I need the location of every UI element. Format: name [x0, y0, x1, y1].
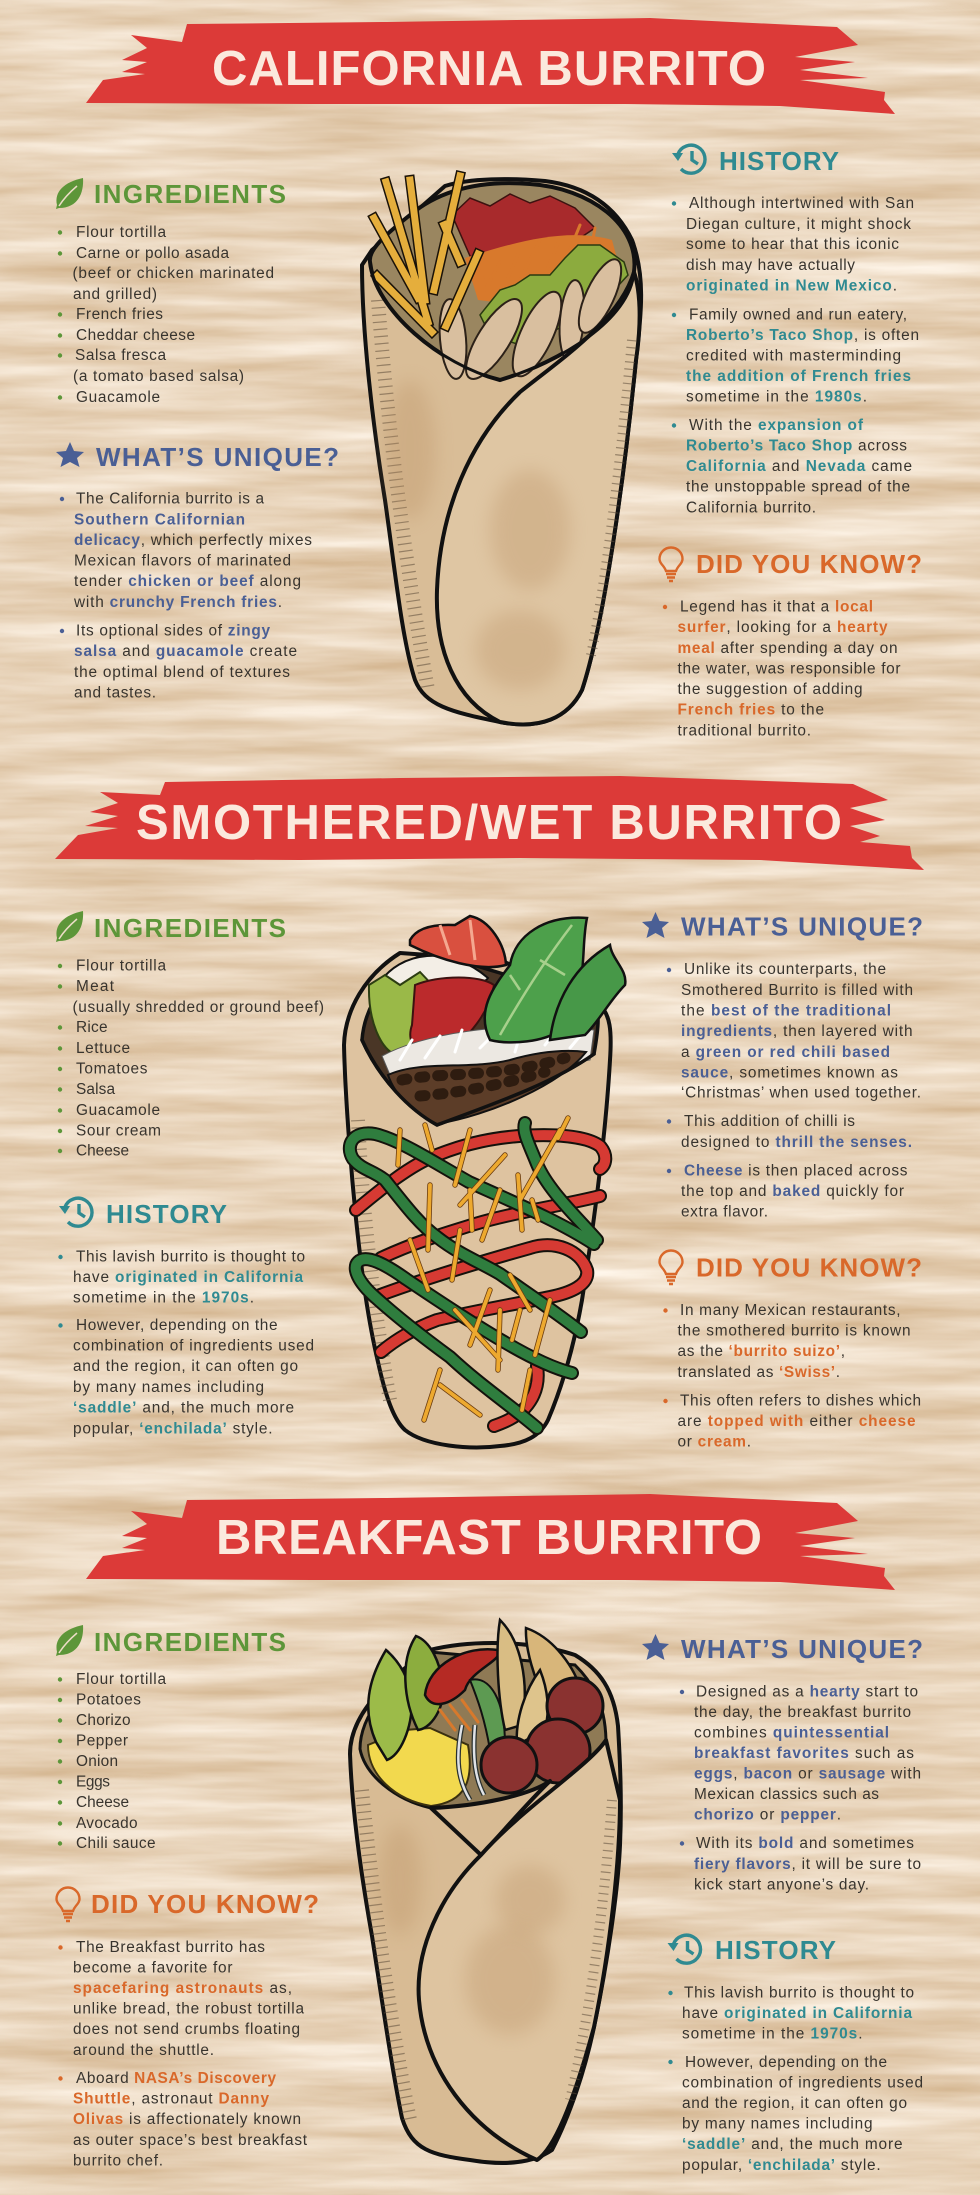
body text: [672, 195, 919, 516]
body text: the water, was responsible for: [678, 660, 900, 677]
ingredients list: [58, 224, 274, 406]
body text: Legend has it that a local: [680, 599, 873, 616]
body text: fiery flavors, it will be sure to: [694, 1856, 921, 1873]
panel: ingredients: [56, 1625, 286, 1852]
body text: Its optional sides of zingy: [76, 622, 270, 640]
body text: ingredients, then layered with: [681, 1023, 912, 1040]
body text: salsa and guacamole create: [74, 643, 297, 660]
ingredients list: Guacamole: [76, 1102, 160, 1119]
panel: history: [672, 145, 919, 516]
body text: meal after spending a day on: [678, 640, 898, 657]
body text: Mexican flavors of marinated: [74, 553, 291, 570]
body text: by many names including: [682, 2116, 872, 2133]
body text: the best of the traditional: [681, 1002, 891, 1020]
body text: kick start anyone’s day.: [694, 1876, 869, 1893]
body text: The Breakfast burrito has: [76, 1939, 265, 1956]
body text: around the shuttle.: [73, 2042, 214, 2059]
body text: ‘Christmas’ when used together.: [681, 1085, 921, 1102]
body text: combination of ingredients used: [682, 2074, 923, 2091]
body text: Roberto’s Taco Shop across: [686, 437, 907, 454]
icon: leaf: [56, 178, 83, 209]
title banner: Breakfast Burrito: [86, 1494, 895, 1590]
body text: are topped with either cheese: [678, 1413, 916, 1430]
body text: the smothered burrito is known: [678, 1322, 910, 1340]
ingredients list: (usually shredded or ground beef): [72, 999, 324, 1016]
body text: Southern Californian: [74, 512, 245, 528]
icon: light bulb: [56, 1888, 80, 1921]
illustration: California burrito: [362, 176, 641, 724]
heading: ingredients: INGREDIENTS: [94, 179, 286, 209]
ingredients list: and grilled): [73, 286, 157, 303]
body text: some to hear that this iconic: [686, 236, 899, 253]
body text: Although intertwined with San: [689, 195, 914, 212]
title banner: Smothered/Wet Burrito: [55, 776, 924, 870]
ingredients list: Meat: [76, 978, 115, 995]
ingredients list: Onion: [76, 1753, 118, 1770]
panel: did you know: [660, 548, 922, 739]
heading: did you know: DID YOU KNOW?: [696, 549, 922, 579]
body text: the optimal blend of textures: [74, 664, 290, 681]
ingredients list: Cheese: [76, 1143, 129, 1160]
body text: as the ‘burrito suizo’,: [678, 1343, 845, 1360]
body text: Unlike its counterparts, the: [684, 961, 886, 978]
title banner: Smothered/Wet Burrito: SMOTHERED/WET BURRITO: [136, 796, 842, 850]
body text: However, depending on the: [76, 1317, 278, 1334]
ingredients list: Flour tortilla: [76, 958, 166, 974]
body text: extra flavor.: [681, 1204, 768, 1221]
body text: burrito chef.: [73, 2153, 163, 2170]
body text: delicacy, which perfectly mixes: [74, 532, 312, 549]
panel: history: [58, 1198, 314, 1437]
body text: translated as ‘Swiss’.: [678, 1364, 840, 1381]
heading: history: HISTORY: [106, 1199, 227, 1229]
body text: [663, 1302, 921, 1451]
heading: what's unique: WHAT’S UNIQUE?: [96, 442, 339, 472]
body text: French fries to the: [678, 702, 824, 718]
body text: eggs, bacon or sausage with: [694, 1766, 921, 1782]
body text: the day, the breakfast burrito: [694, 1704, 911, 1721]
body text: credited with masterminding: [686, 348, 901, 365]
title banner: California Burrito: CALIFORNIA BURRITO: [212, 42, 766, 96]
body text: Family owned and run eatery,: [689, 306, 907, 323]
body text: have originated in California: [73, 1269, 303, 1286]
body text: This addition of chilli is: [684, 1113, 855, 1130]
body text: spacefaring astronauts as,: [73, 1980, 292, 1997]
body text: combination of ingredients used: [73, 1338, 314, 1355]
body text: unlike bread, the robust tortilla: [73, 2000, 304, 2017]
body text: sometime in the 1970s.: [73, 1290, 254, 1306]
ingredients list: [58, 1671, 166, 1852]
icon: clock arrow: [59, 1198, 92, 1226]
ingredients list: Tomatoes: [76, 1060, 148, 1077]
ingredients list: Pepper: [76, 1733, 128, 1750]
body text: Olivas is affectionately known: [73, 2111, 301, 2128]
heading: what's unique: WHAT’S UNIQUE?: [681, 1634, 923, 1664]
body text: [58, 1939, 308, 2170]
panel: what's unique: [56, 442, 339, 702]
body text: with crunchy French fries.: [73, 594, 282, 611]
icon: leaf: [56, 1625, 83, 1656]
ingredients list: Avocado: [76, 1815, 138, 1832]
heading: did you know: DID YOU KNOW?: [696, 1252, 922, 1282]
ingredients list: (a tomato based salsa): [73, 368, 244, 385]
body text: California burrito.: [686, 499, 816, 516]
body text: chorizo or pepper.: [694, 1806, 841, 1824]
ingredients list: Sour cream: [76, 1122, 161, 1139]
section: Breakfast burrito: [56, 1494, 923, 2174]
body text: as outer space’s best breakfast: [73, 2132, 308, 2149]
body text: tender chicken or beef along: [74, 573, 301, 590]
body text: California and Nevada came: [686, 458, 912, 475]
body text: the unstoppable spread of the: [686, 478, 910, 496]
body text: Shuttle, astronaut Danny: [73, 2091, 269, 2108]
body text: popular, ‘enchilada’ style.: [73, 1420, 272, 1437]
ingredients list: Cheddar cheese: [76, 327, 195, 344]
heading: history: HISTORY: [719, 146, 839, 176]
body text: Cheese is then placed across: [684, 1162, 908, 1179]
ingredients list: Chorizo: [76, 1712, 131, 1729]
illustration: breakfast burrito: [350, 1620, 621, 2163]
body text: originated in New Mexico.: [686, 277, 897, 294]
ingredients list: French fries: [76, 306, 163, 323]
title banner: California Burrito: [86, 18, 895, 114]
ingredients list: Salsa: [76, 1081, 115, 1098]
body text: Smothered Burrito is filled with: [681, 982, 913, 999]
section: Smothered/Wet burrito: [55, 776, 924, 1451]
body text: With its bold and sometimes: [696, 1835, 914, 1852]
ingredients list: (beef or chicken marinated: [72, 265, 274, 282]
body text: the top and baked quickly for: [681, 1183, 904, 1200]
body text: breakfast favorites such as: [694, 1745, 914, 1762]
panel: did you know: [56, 1888, 319, 2170]
icon: star: [642, 1634, 669, 1660]
body text: sauce, sometimes known as: [681, 1064, 898, 1082]
heading: ingredients: INGREDIENTS: [94, 913, 286, 943]
body text: [60, 491, 312, 702]
ingredients list: Rice: [76, 1019, 108, 1036]
ingredients list: Potatoes: [76, 1692, 141, 1709]
heading: ingredients: INGREDIENTS: [94, 1627, 286, 1657]
body text: [58, 1248, 314, 1437]
body text: sometime in the 1980s.: [686, 388, 867, 405]
body text: traditional burrito.: [678, 722, 811, 739]
body text: dish may have actually: [686, 257, 855, 274]
body text: Designed as a hearty start to: [696, 1683, 918, 1700]
body text: and the region, it can often go: [682, 2095, 907, 2112]
ingredients list: [58, 958, 324, 1160]
ingredients list: Cheese: [76, 1794, 129, 1811]
body text: and tastes.: [74, 684, 156, 702]
icon: star: [642, 912, 669, 938]
body text: have originated in California: [682, 2005, 912, 2022]
body text: Diegan culture, it might shock: [686, 216, 911, 233]
ingredients list: Chili sauce: [76, 1835, 156, 1852]
icon: leaf: [56, 911, 83, 942]
body text: Mexican classics such as: [694, 1786, 879, 1803]
panel: ingredients: [56, 911, 324, 1160]
heading: what's unique: WHAT’S UNIQUE?: [681, 912, 923, 942]
body text: [680, 1683, 921, 1893]
panel: did you know: [660, 1250, 922, 1451]
title banner: Breakfast Burrito: BREAKFAST BURRITO: [216, 1511, 762, 1565]
body text: [668, 1984, 923, 2174]
panel: what's unique: [642, 1634, 923, 1893]
body text: ‘saddle’ and, the much more: [682, 2136, 902, 2153]
ingredients list: Flour tortilla: [76, 1671, 166, 1688]
ingredients list: Salsa fresca: [75, 347, 166, 364]
body text: surfer, looking for a hearty: [678, 619, 888, 636]
body text: In many Mexican restaurants,: [680, 1302, 900, 1319]
ingredients list: Guacamole: [76, 389, 160, 406]
icon: star: [56, 442, 84, 467]
section: California burrito: [56, 18, 922, 739]
body text: popular, ‘enchilada’ style.: [682, 2157, 881, 2174]
body text: the suggestion of adding: [678, 681, 862, 698]
panel: what's unique: [642, 912, 923, 1221]
body text: sometime in the 1970s.: [682, 2025, 862, 2042]
body text: or cream.: [678, 1434, 751, 1451]
body text: a green or red chili based: [681, 1044, 890, 1061]
body text: [663, 599, 900, 739]
panel: history: [668, 1935, 923, 2174]
body text: However, depending on the: [685, 2054, 887, 2071]
heading: did you know: DID YOU KNOW?: [91, 1889, 319, 1919]
body text: This lavish burrito is thought to: [684, 1984, 914, 2001]
panel: ingredients: [56, 178, 286, 406]
body text: designed to thrill the senses.: [681, 1134, 912, 1151]
body text: Roberto’s Taco Shop, is often: [686, 327, 919, 344]
icon: light bulb: [660, 548, 682, 581]
ingredients list: Carne or pollo asada: [76, 245, 229, 262]
body text: and the region, it can often go: [73, 1358, 298, 1375]
ingredients list: Lettuce: [76, 1040, 130, 1057]
body text: by many names including: [73, 1379, 264, 1396]
body text: With the expansion of: [689, 417, 864, 434]
body text: become a favorite for: [73, 1959, 232, 1976]
body text: combines quintessential: [694, 1724, 889, 1742]
body text: The California burrito is a: [76, 491, 264, 508]
body text: the addition of French fries: [686, 368, 911, 385]
body text: [667, 961, 921, 1221]
ingredients list: Flour tortilla: [76, 224, 166, 241]
icon: light bulb: [660, 1250, 682, 1284]
body text: does not send crumbs floating: [73, 2021, 300, 2038]
illustration: smothered burrito: [344, 916, 625, 1447]
body text: This lavish burrito is thought to: [76, 1248, 305, 1266]
body text: Aboard NASA’s Discovery: [76, 2070, 276, 2087]
icon: clock arrow: [672, 145, 705, 173]
ingredients list: Eggs: [76, 1774, 110, 1791]
icon: clock arrow: [668, 1935, 700, 1963]
body text: ‘saddle’ and, the much more: [73, 1400, 294, 1417]
heading: history: HISTORY: [715, 1935, 836, 1965]
body text: This often refers to dishes which: [680, 1392, 921, 1409]
